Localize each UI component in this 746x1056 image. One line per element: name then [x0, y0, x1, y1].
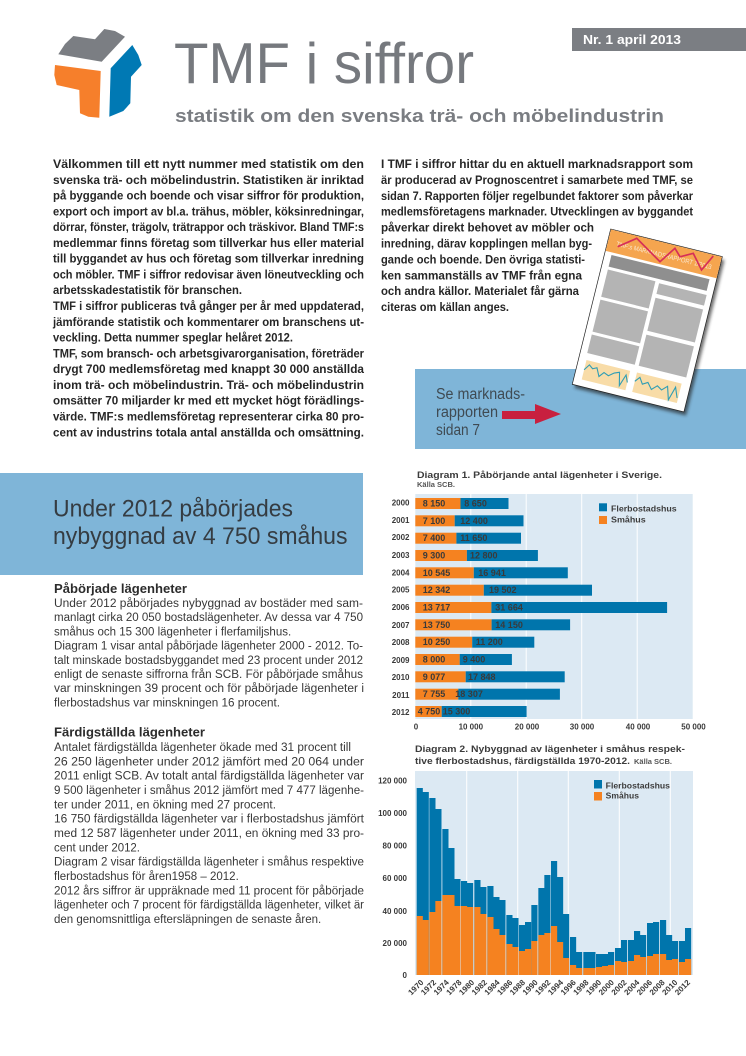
x axis labels: 1994 — [546, 978, 566, 997]
x axis labels: 2000 — [597, 978, 616, 997]
y axis labels — [378, 776, 408, 980]
year labels: 2001 — [392, 516, 410, 525]
y axis labels: 40 000 — [383, 907, 408, 916]
chart title: tive flerbostadshus, färdigställda 1970-2012. — [415, 756, 630, 767]
text block: introduction right column: gande och boende. Den övriga statisti- — [381, 254, 585, 266]
value labels: småhus: 7 400 — [423, 533, 445, 543]
text block: introduction left column: drygt 700 medlemsföretag med knappt 30 000 anställda — [53, 364, 365, 376]
text block: färdigställda lägenheter: med 12 587 lägenheter under 2011, en ökning med 33 pro- — [54, 828, 364, 840]
text block: introduction left column: svenska trä- och möbelindustrin. Statistiken är inriktad — [53, 175, 364, 187]
x axis labels — [414, 722, 706, 732]
year labels — [392, 498, 410, 717]
text block: introduction right column: är producerad av Prognoscentret i samarbete med TMF, se — [381, 175, 693, 187]
text block: påbörjade lägenheter: var minskningen 39 procent och för påbörjade lägenheter i — [54, 683, 364, 695]
y axis labels: 0 — [403, 971, 408, 980]
value labels: småhus: 9 077 — [423, 672, 445, 682]
legend: Flerbostadshus — [611, 504, 677, 514]
value labels: flerbostadshus: 8 650 — [464, 498, 487, 508]
value labels: flerbostadshus: 12 400 — [460, 516, 488, 526]
text block: färdigställda lägenheter: cent under 2012. — [54, 842, 140, 854]
year labels: 2009 — [392, 656, 410, 665]
heading — [53, 496, 348, 550]
y axis labels: 80 000 — [383, 842, 408, 850]
text block: introduction right column: inredning, därav kopplingen mellan byg- — [381, 238, 592, 250]
y axis labels: 60 000 — [383, 874, 408, 883]
text block: introduction right column: citeras om källan anges. — [381, 302, 509, 314]
legend: Flerbostadshus — [606, 781, 670, 791]
text block: färdigställda lägenheter: lägenheter och 7 procent för färdigställda lägenheter, vilket är — [54, 900, 364, 912]
text block: färdigställda lägenheter: 16 750 färdigställda lägenheter var i flerbostadshus jämfört — [54, 814, 365, 826]
text block: påbörjade lägenheter: Diagram 1 visar antal påbörjade lägenheter 2000 - 2012. To- — [54, 641, 363, 653]
småhus bars — [417, 895, 691, 975]
value labels: småhus: 10 250 — [423, 637, 450, 647]
text block: introduction left column — [52, 159, 365, 439]
x axis labels: 1990 — [584, 978, 604, 997]
text block: påbörjade lägenheter: flerbostadshus var minskningen 16 procent. — [54, 697, 280, 709]
x axis labels: 1986 — [495, 978, 515, 997]
flerbostadshus bars — [417, 788, 691, 975]
value labels: flerbostadshus: 19 502 — [489, 585, 517, 595]
x axis labels: 1980 — [457, 978, 477, 997]
year labels: 2000 — [392, 498, 410, 508]
text block: introduction right column: påverkar direkt behovet av möbler och — [381, 223, 594, 235]
x axis labels: 1998 — [572, 978, 591, 997]
x axis labels: 1972 — [419, 978, 439, 997]
x axis labels: 1996 — [559, 978, 578, 997]
year labels: 2012 — [392, 708, 410, 717]
year labels: 2007 — [392, 621, 410, 630]
y axis labels: 20 000 — [383, 939, 408, 948]
value labels: flerbostadshus: 12 800 — [470, 550, 498, 560]
text block: introduction left column: medlemmar finns företag som tillverkar hus eller material — [53, 238, 364, 250]
value labels: småhus: 8 150 — [423, 498, 445, 508]
value labels: flerbostadshus: 14 150 — [495, 620, 523, 630]
text block: färdigställda lägenheter: ter under 2011, en ökning med 27 procent. — [54, 799, 276, 811]
year labels: 2005 — [392, 586, 410, 594]
bar chart: diagram 1 — [392, 470, 706, 732]
market report thumbnail — [572, 229, 725, 416]
legend: Småhus — [606, 791, 639, 801]
text block: påbörjade lägenheter: småhus och 15 300 lägenheter i flerfamiljshus. — [54, 626, 291, 638]
value labels: flerbostadshus: 11 650 — [460, 533, 487, 543]
chart title: Diagram 2. Nybyggnad av lägenheter i småhus respek- — [415, 744, 685, 755]
text block: introduction left column: TMF i siffror publiceras två gånger per år med uppdaterad, — [53, 301, 364, 313]
value labels: flerbostadshus: 11 200 — [476, 637, 503, 647]
issue badge: Nr. 1 april 2013 — [583, 32, 681, 47]
year labels: 2011 — [392, 691, 410, 700]
chart title — [415, 744, 685, 767]
x axis labels: 1984 — [483, 978, 502, 997]
x axis labels: 40 000 — [626, 722, 651, 732]
panel: see market report — [415, 369, 746, 449]
callout text — [436, 386, 525, 439]
x axis labels: 30 000 — [570, 722, 595, 732]
value labels: småhus: 7 755 — [423, 689, 445, 699]
text block: introduction left column: till byggandet av hus och företag som tillverkar inredning — [53, 254, 364, 266]
value labels: småhus: 13 750 — [423, 620, 450, 630]
x axis labels: 0 — [414, 722, 419, 732]
text block: introduction right column: sidan 7. Rapporten följer regelbundet faktorer som påverkar — [381, 191, 693, 203]
value labels: flerbostadshus: 17 848 — [468, 672, 496, 682]
text block: introduction left column: veckling. Detta nummer speglar helåret 2012. — [53, 333, 293, 345]
text block: introduction right column: och andra källor. Materialet får gärna — [381, 286, 580, 298]
chart title: Diagram 1. Påbörjande antal lägenheter i Sverige. — [417, 470, 662, 481]
value labels: småhus — [418, 498, 450, 716]
text block: färdigställda lägenheter: den genomsnittliga eftersläpningen de senaste åren. — [54, 914, 321, 926]
text block: färdigställda lägenheter: 26 250 lägenheter under 2012 jämfört med 20 064 under — [54, 756, 364, 768]
legend — [599, 503, 677, 524]
x axis labels: 1970 — [406, 978, 426, 997]
text block: introduction left column: inom trä- och möbelindustrin. Trä- och möbelindustrin — [53, 380, 364, 392]
x axis labels: 2008 — [648, 978, 667, 997]
x axis labels: 1982 — [470, 978, 489, 997]
title: TMF i siffror — [174, 32, 474, 96]
x axis labels: 1990 — [521, 978, 540, 997]
blue bars — [442, 498, 667, 717]
value labels: flerbostadshus: 9 400 — [463, 654, 485, 664]
text block: introduction right column: ken sammanställs av TMF från egna — [381, 270, 583, 282]
year labels: 2010 — [392, 673, 410, 682]
text block: introduction left column: på byggande och boende och visar siffror för produktion, — [53, 191, 364, 203]
x axis labels: 10 000 — [459, 722, 484, 732]
year labels: 2003 — [392, 551, 410, 560]
text block: introduction left column: arbetsskadestatistik för branschen. — [53, 285, 242, 297]
text block: färdigställda lägenheter: 2012 års siffror är uppräknade med 11 procent för påbörjade — [54, 885, 364, 897]
section heading: Påbörjade lägenheter — [54, 582, 187, 596]
x axis labels: 2012 — [673, 978, 693, 997]
value labels: småhus: 9 300 — [423, 550, 445, 560]
text block: introduction left column: cent av industrins totala antal anställda och omsättning. — [53, 427, 364, 439]
text block: introduction right column: I TMF i siffror hittar du en aktuell marknadsrapport som — [381, 159, 693, 171]
x axis labels: 20 000 — [515, 722, 540, 732]
text block: introduction left column: värde. TMF:s medlemsföretag representerar cirka 80 pro- — [53, 412, 364, 424]
subtitle: statistik om den svenska trä- och möbelindustrin — [175, 106, 664, 126]
heading: Under 2012 påbörjades — [53, 496, 293, 522]
x axis labels: 2004 — [622, 978, 642, 997]
section heading: Färdigställda lägenheter — [54, 726, 205, 740]
stacked bar chart: diagram 2 — [378, 744, 693, 997]
value labels: flerbostadshus: 15 300 — [443, 706, 470, 716]
y axis labels: 120 000 — [378, 776, 408, 786]
year labels: 2008 — [392, 638, 410, 647]
y axis labels: 100 000 — [378, 809, 408, 818]
value labels: småhus: 4 750 — [418, 706, 440, 716]
text block: färdigställda lägenheter: flerbostadshus för åren1958 – 2012. — [54, 871, 239, 883]
panel: headline — [0, 473, 363, 575]
value labels: småhus: 7 100 — [423, 516, 445, 526]
x axis labels: 2006 — [635, 978, 654, 997]
text block: färdigställda lägenheter: Antalet färdigställda lägenheter ökade med 31 procent till — [54, 742, 351, 754]
text block: färdigställda lägenheter: 2011 enligt SCB. Av totalt antal färdigställda lägenheter var — [54, 771, 364, 783]
value labels: flerbostadshus: 16 941 — [478, 568, 506, 578]
callout text: Se marknads- — [436, 386, 525, 403]
chart source: Källa SCB. — [634, 759, 672, 766]
value labels: flerbostadshus: 31 664 — [495, 602, 523, 612]
text block: introduction left column: Välkommen till ett nytt nummer med statistik om den — [53, 159, 364, 171]
value labels: småhus: 10 545 — [423, 568, 450, 578]
text block: färdigställda lägenheter: 9 500 lägenheter i småhus 2012 jämfört med 7 477 lägenhe- — [54, 785, 364, 797]
bars — [417, 788, 691, 975]
text block: färdigställda lägenheter — [54, 726, 365, 926]
arrow: to report — [502, 404, 561, 424]
text block: färdigställda lägenheter: Diagram 2 visar färdigställda lägenheter i småhus respektive — [54, 857, 364, 869]
value labels: småhus: 8 000 — [423, 654, 445, 664]
text block: påbörjade lägenheter: manlagt cirka 20 050 bostadslägenheter. Av dessa var 4 750 — [54, 612, 363, 624]
value labels: flerbostadshus: 18 307 — [455, 689, 483, 699]
orange bars — [415, 498, 492, 717]
x axis labels: 1978 — [445, 978, 464, 997]
text block: påbörjade lägenheter: enligt de senaste siffrorna från SCB. För påbörjade småhus — [54, 669, 363, 681]
chart source: Källa SCB. — [417, 482, 455, 489]
x axis labels: 1992 — [533, 978, 553, 997]
x axis labels: 1974 — [432, 978, 451, 997]
legend — [594, 780, 670, 801]
x axis labels — [406, 978, 693, 997]
x axis labels: 2002 — [610, 978, 629, 997]
text block: påbörjade lägenheter — [54, 582, 364, 709]
icon: TMF logo — [54, 29, 142, 118]
text block: introduction left column: jämförande statistik och kommentarer om branschens ut- — [52, 317, 364, 329]
market report thumbnail: TMF:s MARKNADSRAPPORT 1/2013 — [615, 241, 712, 271]
value labels: småhus: 13 717 — [423, 602, 450, 612]
text block: introduction right column — [381, 159, 693, 314]
callout text: sidan 7 — [436, 422, 480, 439]
year labels: 2002 — [392, 533, 410, 542]
text block: introduction left column: dörrar, fönster, trägolv, trätrappor och träskivor. Bland TMF:s — [53, 222, 364, 234]
value labels: småhus: 12 342 — [423, 585, 450, 595]
text block: introduction left column: och möbler. TMF i siffror redovisar även löneutveckling och — [53, 270, 364, 282]
year labels: 2006 — [392, 603, 410, 612]
text block: introduction right column: medlemsföretagens marknader. Utvecklingen av byggandet — [381, 207, 693, 219]
x axis labels: 50 000 — [681, 722, 706, 732]
x axis labels: 1988 — [508, 978, 527, 997]
callout text: rapporten — [436, 404, 498, 421]
value labels: flerbostadshus — [443, 498, 523, 716]
text block: introduction left column: TMF, som bransch- och arbetsgivarorganisation, företräder — [53, 348, 364, 360]
legend: Småhus — [611, 514, 646, 524]
heading: nybyggnad av 4 750 småhus — [53, 523, 348, 550]
text block: påbörjade lägenheter: Under 2012 påbörjades nybyggnad av bostäder med sam- — [54, 598, 363, 610]
issue badge — [572, 28, 746, 51]
text block: introduction left column: omsätter 70 miljarder kr med ett mycket högt förädlings- — [53, 396, 364, 408]
text block: påbörjade lägenheter: talt minskade bostadsbyggandet med 23 procent under 2012 — [54, 655, 363, 667]
year labels: 2004 — [392, 568, 410, 578]
text block: introduction left column: export och import av bl.a. trähus, möbler, köksinredningar, — [53, 206, 364, 218]
x axis labels: 2010 — [660, 978, 680, 997]
